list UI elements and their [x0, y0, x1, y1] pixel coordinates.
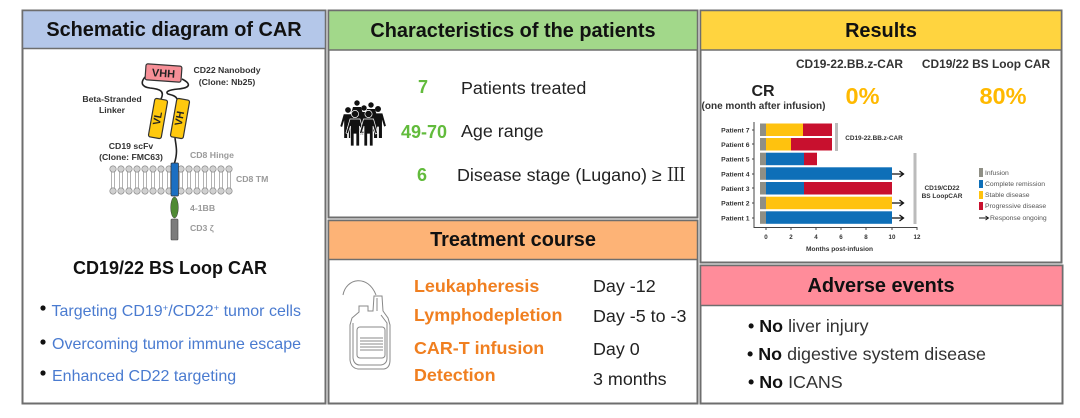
labels: 4-1BB — [190, 203, 215, 213]
patient stats: Age range — [461, 121, 544, 141]
feature list — [40, 303, 301, 385]
chart legend — [979, 168, 1047, 222]
heading: adverse events: Adverse events — [807, 275, 955, 297]
schedule rows: 3 months — [593, 369, 667, 389]
patient stats — [401, 77, 686, 187]
transmembrane, 4-1BB, CD3 zeta — [171, 163, 178, 196]
VL domain: VL — [151, 110, 165, 126]
patient 5 — [721, 153, 817, 165]
x axis labels: 4 — [814, 234, 818, 241]
feature list: + — [214, 303, 220, 314]
heading: results — [700, 10, 1062, 50]
CR comparison: CR — [751, 83, 775, 100]
labels: CD8 Hinge — [190, 150, 234, 160]
labels: Linker — [99, 105, 126, 115]
patient stats: Disease stage (Lugano) ≥ Ⅲ — [457, 160, 686, 187]
schedule rows: Detection — [414, 365, 496, 385]
icon: group of people — [340, 100, 386, 146]
chart legend: Complete remission — [985, 181, 1045, 188]
patient 2 — [721, 197, 892, 209]
VH domain — [170, 98, 190, 139]
patient stats: Patients treated — [461, 78, 586, 98]
panel: results — [700, 10, 1062, 262]
heading: schematic diagram of CAR — [22, 10, 326, 48]
x axis labels: 0 — [764, 234, 768, 241]
subheading: CD19/22 BS Loop CAR: CD19/22 BS Loop CAR — [73, 258, 267, 278]
labels: CD8 TM — [236, 174, 268, 184]
schedule rows: Leukapheresis — [414, 276, 539, 296]
panel: adverse events — [700, 266, 1062, 404]
feature list: /CD22 — [168, 303, 214, 320]
CR comparison: CD19-22.BB.z-CAR — [796, 57, 903, 71]
feature list: Enhanced CD22 targeting — [52, 368, 236, 385]
bar chart: swimmer plot — [721, 122, 963, 253]
heading: characteristics: Characteristics of the patients — [370, 20, 656, 42]
patient stats: 6 — [417, 165, 427, 185]
schedule rows — [414, 276, 687, 389]
x axis labels: 6 — [839, 234, 843, 241]
VL domain — [148, 98, 168, 139]
labels: Beta-Stranded — [82, 94, 142, 104]
x axis labels: 2 — [789, 234, 793, 241]
icon: blood bag — [343, 281, 390, 369]
patient 3 — [721, 182, 892, 194]
patient stats: 7 — [418, 77, 428, 97]
patient 3: Patient 3 — [721, 186, 750, 193]
diagram: CAR structure — [82, 64, 268, 240]
chart legend: Response ongoing — [990, 215, 1047, 222]
chart legend: Progressive disease — [985, 203, 1046, 210]
adverse event list — [747, 316, 986, 392]
CR comparison: 80% — [979, 83, 1027, 109]
feature list: + — [163, 303, 169, 314]
heading: treatment course — [328, 220, 698, 260]
heading: adverse events — [700, 266, 1062, 306]
patient 4: Patient 4 — [721, 172, 750, 178]
x axis labels: 12 — [914, 234, 921, 241]
CR comparison: (one month after infusion) — [702, 101, 825, 112]
feature list: Overcoming tumor immune escape — [52, 336, 301, 353]
bar chart: swimmer plot: CD19-22.BB.z-CAR — [845, 135, 903, 142]
labels: CD22 Nanobody — [193, 65, 261, 75]
heading: results: Results — [845, 20, 917, 42]
adverse event list: • No digestive system disease — [747, 344, 986, 364]
patient 6: Patient 6 — [721, 142, 750, 149]
patient 7: Patient 7 — [721, 128, 750, 134]
bar chart: swimmer plot: CD19/CD22 — [924, 185, 960, 192]
x axis labels: Months post-infusion — [806, 246, 873, 253]
panel: treatment course — [328, 220, 698, 404]
schedule rows: Day -12 — [593, 276, 656, 296]
patient 5: Patient 5 — [721, 156, 750, 164]
CR comparison: 0% — [846, 83, 880, 109]
CR comparison: CD19/22 BS Loop CAR — [922, 57, 1050, 71]
patient 2: Patient 2 — [721, 200, 750, 208]
feature list: tumor cells — [219, 303, 301, 320]
labels — [82, 65, 268, 233]
labels: CD19 scFv — [109, 141, 153, 151]
panel: characteristics of the patients — [328, 10, 698, 218]
heading: characteristics — [328, 10, 698, 50]
patient 7 — [721, 124, 832, 136]
panel: schematic diagram of CAR — [22, 10, 326, 404]
CR comparison — [702, 57, 1050, 112]
schedule rows: Day 0 — [593, 339, 640, 359]
patient 1 — [721, 211, 892, 224]
adverse event list: • No ICANS — [748, 372, 843, 392]
chart legend: Infusion — [985, 170, 1009, 177]
VHH domain — [145, 64, 182, 82]
schedule rows: CAR-T infusion — [414, 338, 544, 358]
VH domain: VH — [173, 110, 187, 127]
feature list: Targeting CD19 — [52, 303, 163, 320]
labels: CD3 ζ — [190, 223, 214, 233]
patient 1: Patient 1 — [721, 216, 750, 222]
axes — [754, 122, 917, 228]
patient stats: 49-70 — [401, 122, 447, 142]
labels: (Clone: FMC63) — [99, 152, 163, 162]
heading: schematic diagram of CAR: Schematic diagram of CAR — [46, 19, 302, 41]
schedule rows: Lymphodepletion — [414, 305, 562, 325]
schedule rows: Day -5 to -3 — [593, 306, 687, 326]
bar chart: swimmer plot: BS LoopCAR — [922, 193, 963, 200]
group brackets — [835, 123, 838, 151]
linkers — [142, 77, 188, 163]
heading: treatment course: Treatment course — [430, 229, 596, 251]
x axis labels: 8 — [864, 234, 868, 241]
chart legend: Stable disease — [985, 192, 1030, 199]
VHH domain: VHH — [151, 67, 175, 81]
patient 4 — [721, 167, 892, 180]
labels: (Clone: Nb25) — [199, 77, 255, 87]
membrane bilayer — [110, 166, 232, 194]
adverse event list: • No liver injury — [748, 316, 869, 336]
response arrows — [892, 171, 904, 221]
x axis labels: 10 — [889, 234, 896, 241]
patient 6 — [721, 138, 832, 150]
x axis labels — [764, 234, 921, 253]
